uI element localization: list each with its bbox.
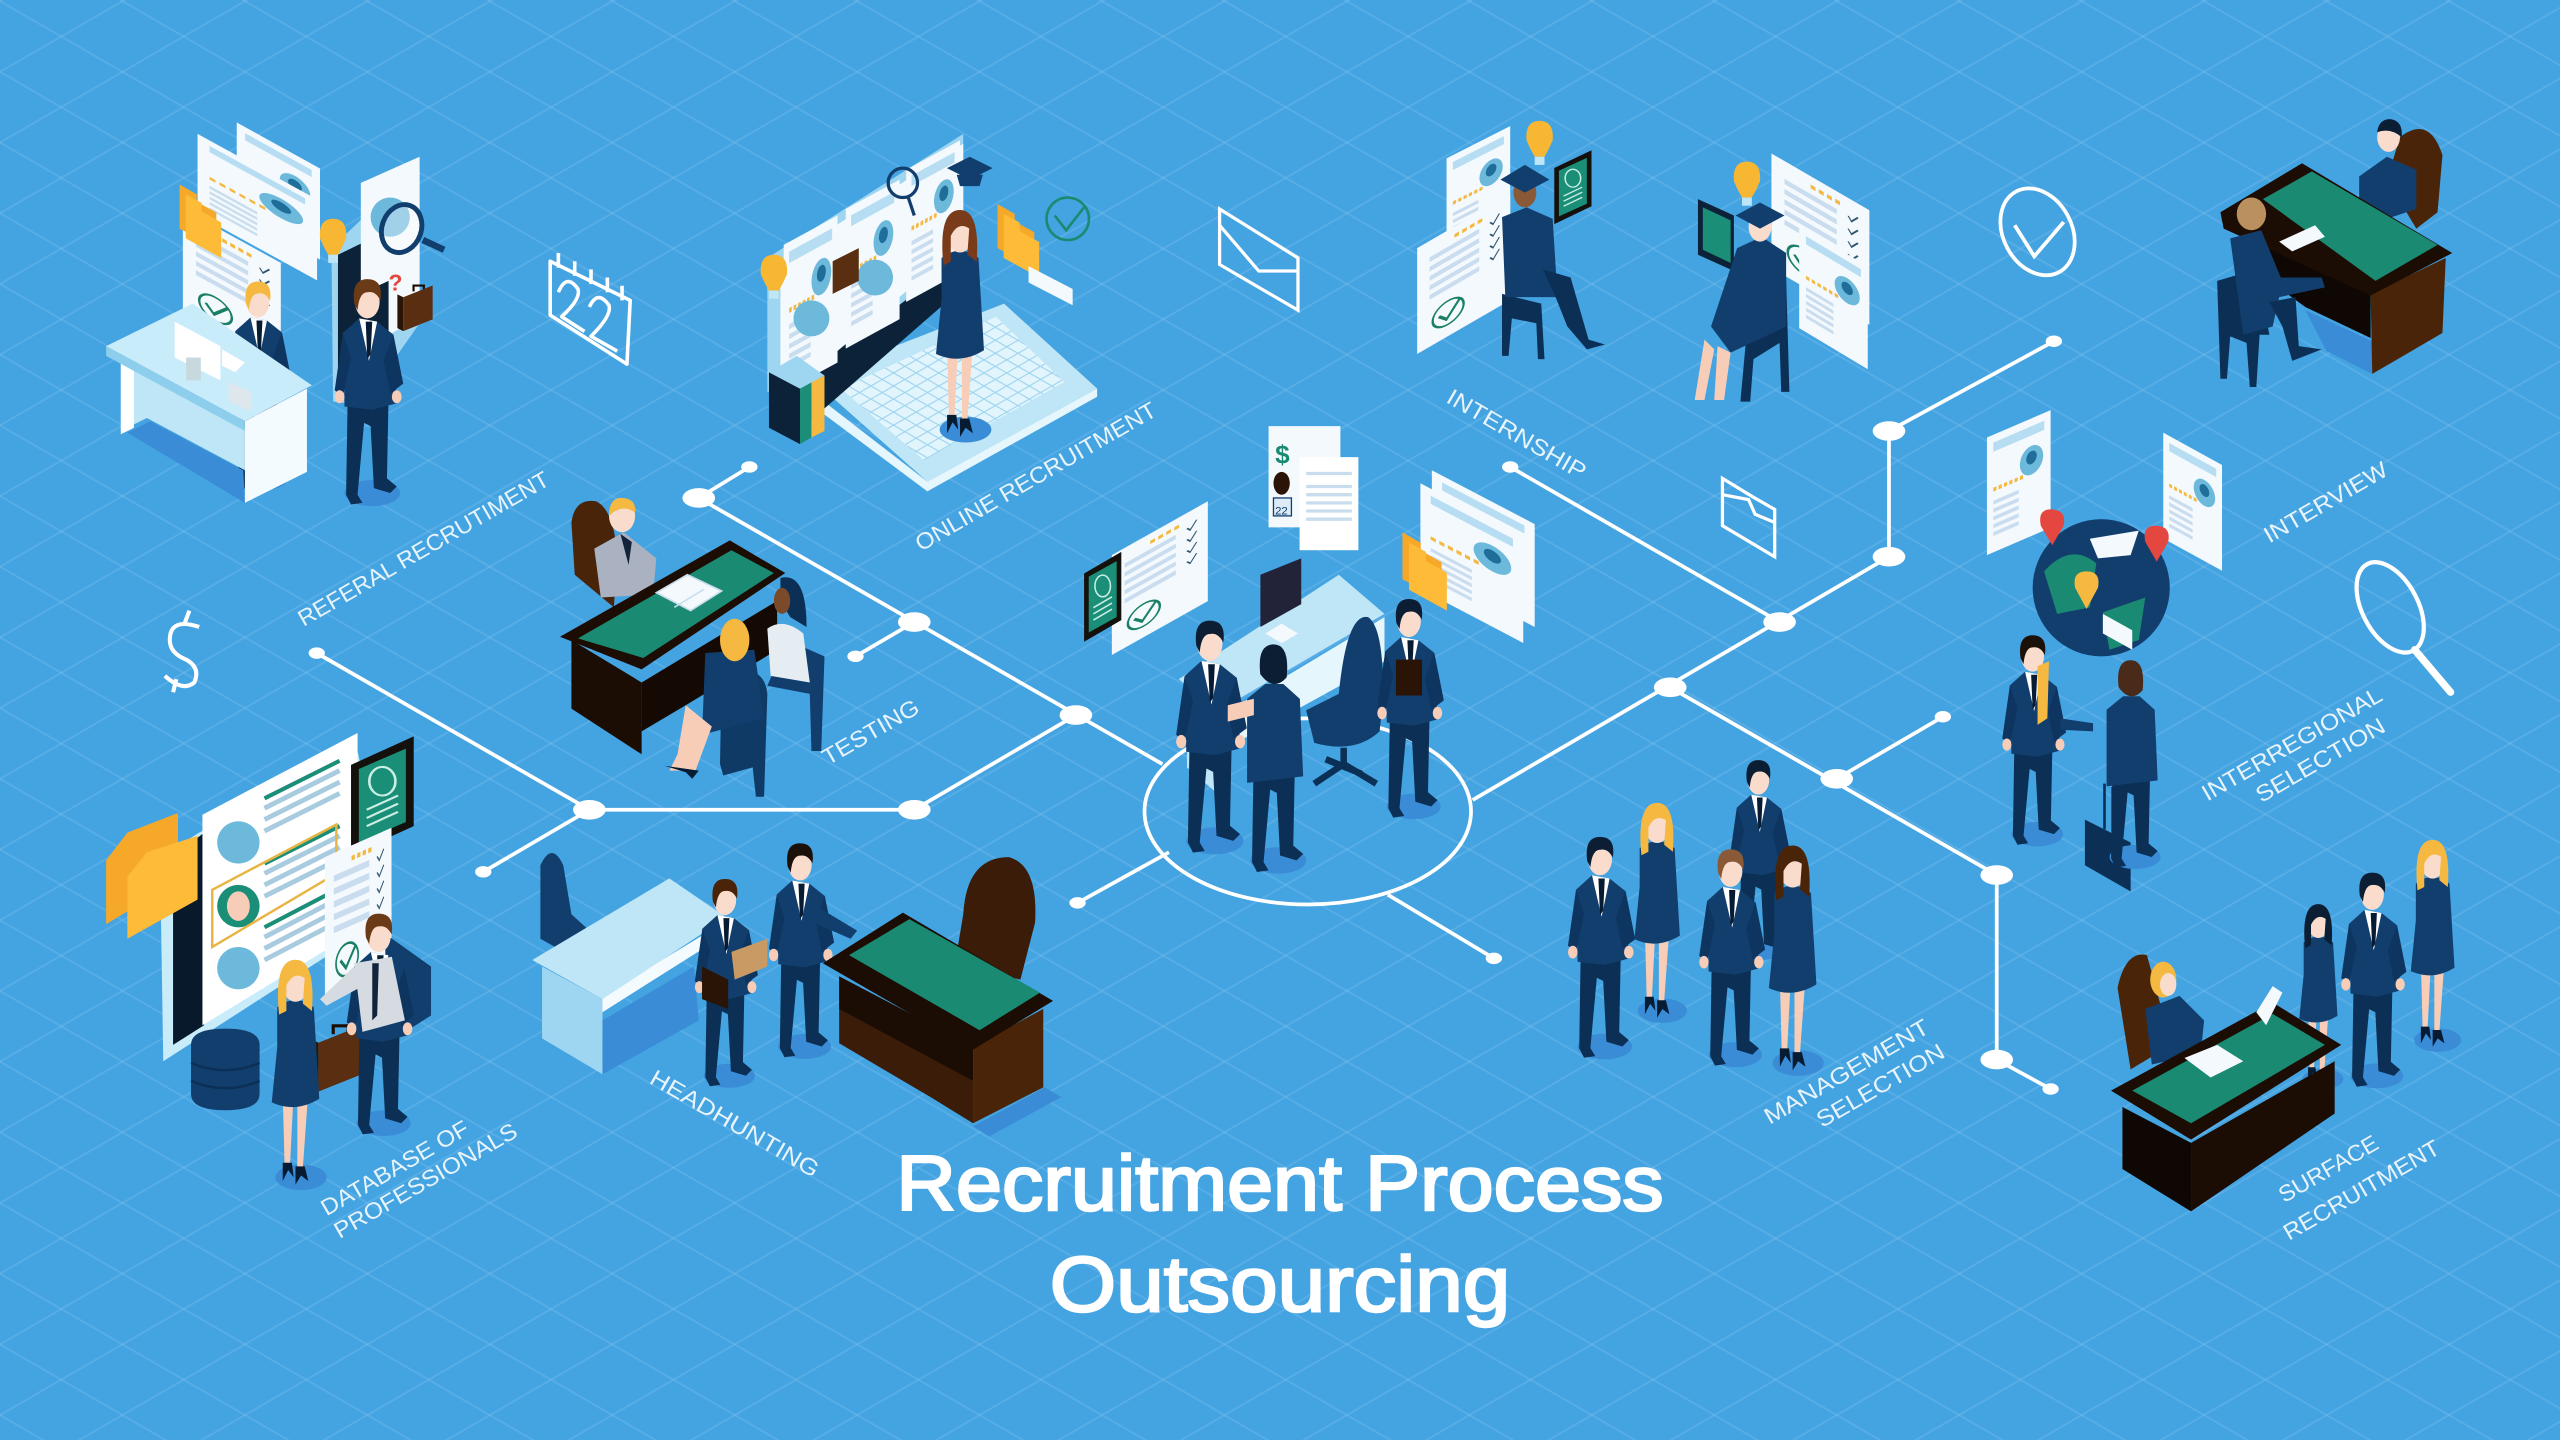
icon: folder	[1722, 478, 1775, 557]
scene: online recruitment	[761, 134, 1097, 491]
man on phone	[335, 279, 403, 506]
folders	[106, 813, 198, 939]
label: management selection: SELECTION	[1812, 1038, 1949, 1132]
label: testing: TESTING	[817, 694, 924, 770]
traveller from back	[2107, 660, 2161, 869]
floating CV documents	[180, 122, 320, 369]
checklist documents with tablet	[1084, 501, 1208, 655]
tablet	[351, 736, 414, 855]
scene: database of professionals	[106, 733, 431, 1190]
label: online recruitment: ONLINE RECRUITMENT	[910, 396, 1161, 556]
folder	[998, 204, 1039, 278]
woman handing paper	[2299, 904, 2343, 1089]
man left	[1176, 621, 1247, 854]
light bulb	[761, 255, 787, 299]
seated candidate	[2217, 198, 2325, 387]
magnifier	[888, 168, 918, 216]
left documents	[1987, 410, 2051, 555]
scene: internship left	[1417, 121, 1605, 359]
brown chair	[2387, 129, 2442, 229]
white desk	[532, 878, 727, 1074]
reception desk	[106, 304, 312, 503]
seated woman	[2145, 962, 2204, 1064]
label: database of professionals: DATABASE OF	[316, 1115, 473, 1221]
blonde woman	[1634, 803, 1687, 1023]
icon: magnifier	[2343, 551, 2451, 692]
suitcase	[2085, 784, 2131, 891]
light bulb	[1526, 121, 1553, 165]
label: surface recruitment: RECRUITMENT	[2278, 1134, 2444, 1245]
woman at screen	[936, 210, 991, 443]
brown chair	[955, 857, 1035, 980]
scene: headhunting	[532, 843, 1061, 1136]
scene: referral recruitment	[106, 122, 444, 506]
binders	[385, 934, 431, 1035]
graduation cap	[947, 157, 993, 186]
green desk	[823, 913, 1061, 1136]
manager chair	[571, 501, 617, 607]
paper	[2256, 986, 2282, 1025]
scene: testing	[560, 498, 824, 797]
label: interregional selection: INTERREGIONAL	[2197, 681, 2387, 806]
binders	[769, 356, 824, 444]
label: interregional selection: SELECTION	[2251, 712, 2390, 808]
woman right	[1769, 845, 1824, 1076]
icon: dollar sign	[165, 611, 199, 692]
man centre	[1699, 849, 1765, 1067]
man middle from back	[1228, 644, 1306, 874]
green desk	[2220, 163, 2452, 374]
check badge	[1047, 198, 1089, 240]
icon: calendar	[550, 253, 630, 364]
scene: internship right	[1695, 153, 1869, 402]
icon: envelope	[1220, 209, 1298, 310]
title	[896, 1139, 1664, 1328]
man right with folder	[1377, 599, 1444, 819]
man back left	[1730, 760, 1790, 960]
checklist sheet	[325, 828, 392, 1001]
icon: check circle	[1986, 175, 2089, 288]
label: interview: INTERVIEW	[2259, 456, 2392, 548]
label: headhunting: HEADHUNTING	[646, 1064, 824, 1182]
globe	[2033, 509, 2170, 656]
scene: management selection	[1568, 760, 1824, 1076]
brown chair	[2118, 955, 2171, 1069]
flowchart connector network	[309, 336, 2062, 1095]
note card	[1029, 266, 1073, 305]
briefcase	[397, 286, 433, 331]
contract documents: 22	[1275, 505, 1288, 517]
man	[2341, 873, 2406, 1088]
label: database of professionals: PROFESSIONALS	[329, 1117, 522, 1244]
title: Recruitment Process	[896, 1139, 1664, 1227]
briefcase	[310, 1026, 361, 1092]
seated man	[1500, 165, 1605, 359]
scene: interview	[2217, 119, 2452, 387]
man with yellow vest	[2002, 635, 2093, 846]
laptop screen with cards	[767, 134, 963, 421]
scene: central handshake	[1084, 426, 1535, 874]
green desk	[560, 540, 785, 754]
magnifier	[375, 199, 444, 258]
scene: interregional selection	[1987, 410, 2222, 891]
man with grey shirt	[320, 914, 414, 1136]
right documents	[2163, 433, 2222, 571]
title: Outsourcing	[1050, 1240, 1510, 1328]
manager in grey suit	[594, 498, 656, 598]
blonde woman	[2411, 840, 2461, 1052]
seated interviewer	[2359, 119, 2416, 219]
receptionist	[228, 281, 291, 490]
label: surface recruitment: SURFACE	[2274, 1130, 2383, 1208]
label: management selection: MANAGEMENT	[1759, 1014, 1934, 1129]
walking man with box	[695, 879, 767, 1088]
seated woman	[1695, 202, 1789, 402]
contract documents	[1269, 426, 1358, 550]
documents	[1771, 153, 1869, 369]
CV documents with folder	[1402, 470, 1535, 643]
profile screen	[160, 733, 392, 1061]
applicants on chairs	[664, 577, 824, 797]
documents	[1417, 126, 1510, 354]
label: referal recruitment: REFERAL RECRUTIMENT	[293, 466, 554, 631]
label: internship: INTERNSHIP	[1442, 383, 1591, 484]
woman	[272, 960, 327, 1190]
contract documents: $	[1275, 440, 1290, 470]
tablet	[1554, 150, 1592, 224]
office chair	[1306, 617, 1383, 784]
tablet	[1698, 199, 1734, 271]
scene: surface recruitment	[2111, 840, 2461, 1211]
phone with profile: ?	[389, 270, 403, 296]
light bulb	[1734, 162, 1760, 206]
office desk	[1179, 558, 1384, 797]
man far left	[1568, 837, 1635, 1059]
database cylinder	[191, 1029, 260, 1110]
laptop base with keyboard	[811, 304, 1097, 491]
phone with profile	[320, 157, 420, 405]
green desk	[2111, 1002, 2341, 1211]
man in navy guiding	[769, 843, 857, 1059]
blue chair	[540, 853, 607, 947]
